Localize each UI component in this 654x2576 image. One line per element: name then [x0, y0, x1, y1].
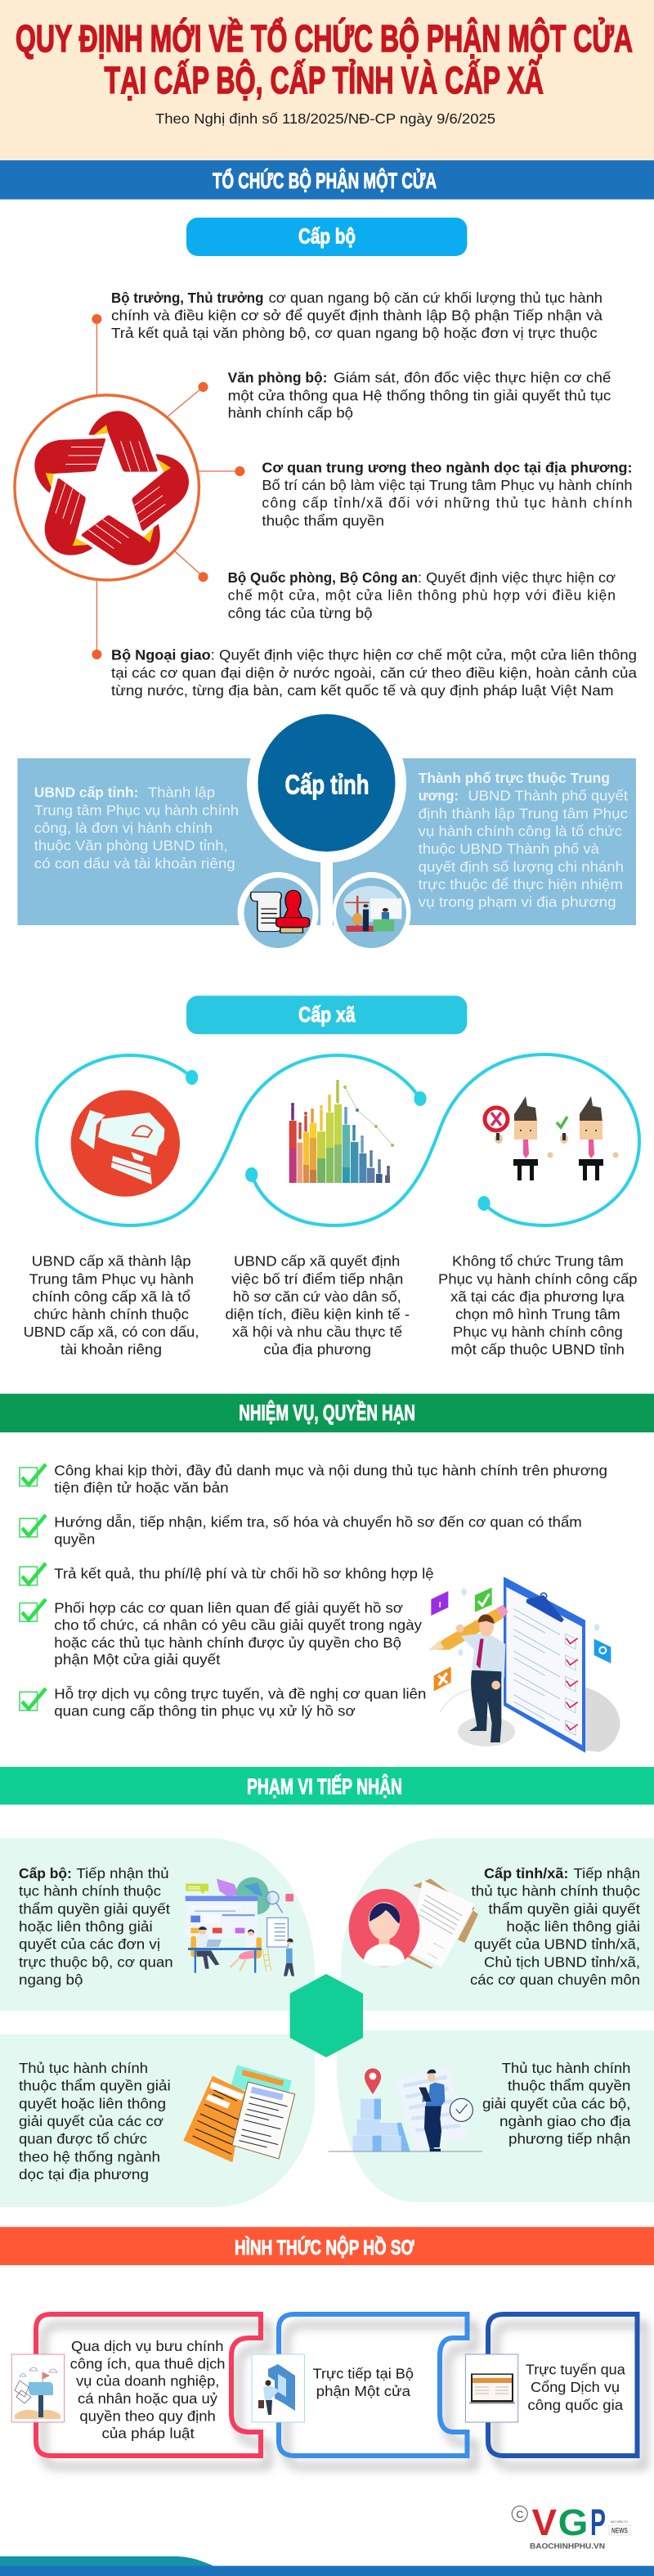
text: UBND cấp tỉnh: Trung tâm Phục vụ hành chính: [34, 802, 239, 819]
text: online: công quốc gia: [527, 2397, 623, 2413]
badge: Cấp tỉnh: Cấp tỉnh: [284, 770, 370, 800]
text: direct: Trực tiếp tại Bộ: [313, 2366, 414, 2382]
text: UBND cấp tỉnh: UBND cấp tỉnh:: [34, 784, 138, 801]
text block: Cơ quan trung ương theo ngành dọc: [262, 459, 633, 528]
text: postal: Qua dịch vụ bưu chính: [71, 2338, 224, 2354]
text: Cấp bộ: [19, 1865, 173, 1988]
pill: Cấp bộ: Cấp bộ: [298, 224, 356, 249]
text: vertical agencies: giải quyết của các cơ: [19, 2113, 164, 2129]
item 2: quyền: [54, 1531, 95, 1547]
text: vertical agencies: Thủ tục hành chính: [19, 2060, 148, 2076]
text: online: Cổng Dịch vụ: [531, 2379, 620, 2395]
pill: Cấp bộ: [186, 218, 467, 256]
text: Cấp xã column 2: diện tích, điều kiện kinh tế -: [226, 1306, 410, 1322]
text: Thành phố trực thuộc Trung ương: vụ trong phạm vi địa phương: [419, 894, 616, 910]
item 2: Hướng dẫn, tiếp nhận, kiểm tra, số hóa và chuyển hồ sơ đến cơ quan có thẩm: [54, 1513, 582, 1530]
card: postal submission: [11, 2314, 261, 2456]
text: UBND cấp tỉnh: có con dấu và tài khoản riêng: [34, 855, 235, 871]
text: Cấp xã column 3: chọn mô hình Trung tâm: [455, 1306, 620, 1322]
item 5: Hỗ trợ dịch vụ công trực tuyến, và đề nghị cơ quan liên: [54, 1685, 426, 1702]
text: Cấp xã column 1: chức hành chính thuộc: [34, 1306, 189, 1322]
icon: legal counter scene: [336, 878, 406, 948]
text block: Bộ trưởng, Thủ trưởng: cơ quan ngang bộ căn cứ khối lượng thủ tục hành: [269, 290, 602, 306]
text: UBND cấp tỉnh: thuộc Văn phòng UBND tỉnh,: [34, 838, 228, 854]
item 3: [20, 1563, 434, 1585]
subtitle: Theo Nghị định số 118/2025/NĐ-CP ngày 9/6/2025: [155, 110, 495, 127]
text: UBND cấp tỉnh: Thành lập: [148, 784, 215, 801]
text block: Bộ Ngoại giao: : Quyết định việc thực hiện cơ chế một cửa, một cửa liên thông: [211, 646, 637, 663]
text: Cấp xã column 2: của địa phương: [263, 1342, 371, 1358]
section heading: Hình thức nộp hồ sơ: HÌNH THỨC NỘP HỒ SƠ: [235, 2235, 414, 2259]
illustration: person with parcels and location pin: [329, 2066, 482, 2151]
text: Cấp xã column 3: xã tại các địa phương lựa: [450, 1288, 625, 1305]
logo: VGP News: [512, 2502, 630, 2551]
text: Cấp bộ: quyết của các đơn vị: [19, 1936, 160, 1953]
text: direct: phận Một cửa: [316, 2383, 410, 2399]
text: Thành phố trực thuộc Trung ương: thuộc UBND Thành phố và: [419, 841, 599, 857]
text block: Văn phòng bộ: Văn phòng bộ:: [228, 370, 327, 386]
text: Thành phố trực thuộc Trung ương: Thành phố trực thuộc Trung: [419, 770, 610, 786]
text: Cấp xã column 2: UBND cấp xã quyết định: [234, 1253, 400, 1270]
text: Cấp xã column 1: UBND cấp xã, có con dấu,: [24, 1324, 199, 1340]
logo: VGP News: BÁO ĐIỆN TỬ: [611, 2520, 628, 2524]
text: Cấp xã column 1: tài khoản riêng: [60, 1342, 162, 1358]
text block: Cơ quan trung ương theo ngành dọc: Bố trí cán bộ làm việc tại Trung tâm Phục vụ hành chính: [262, 477, 633, 493]
text: Cấp xã column 1: [24, 1253, 199, 1358]
text: Cấp bộ: ngang bộ: [19, 1971, 83, 1988]
text: Cấp xã column 3: Phục vụ hành chính công cấp: [438, 1270, 638, 1287]
text: postal: công ích, qua thuê dịch: [70, 2355, 226, 2371]
text block: Bộ Quốc phòng, Bộ Công an: Bộ Quốc phòng, Bộ Công an: [228, 569, 418, 586]
text: Cấp tỉnh/xã: thủ tục hành chính thuộc: [471, 1883, 640, 1899]
text: Cấp bộ: Tiếp nhận thủ: [76, 1865, 169, 1881]
item 4: [20, 1599, 422, 1668]
text: Cấp xã column 1: Trung tâm Phục vụ hành: [29, 1270, 194, 1287]
logo: VGP News: C: [517, 2509, 523, 2520]
logo: VGP News: P: [590, 2502, 606, 2543]
text: Cấp tỉnh/xã: [470, 1865, 640, 1988]
text: Cấp tỉnh/xã: các cơ quan chuyên môn: [470, 1971, 640, 1988]
decorative S-curve loops: [37, 1054, 639, 1225]
section heading: Nhiệm vụ, quyền hạn: NHIỆM VỤ, QUYỀN HẠN: [239, 1400, 415, 1425]
text block: Bộ Ngoại giao: Bộ Ngoại giao: [111, 646, 211, 663]
icon: star of five hands emblem: [15, 395, 200, 584]
chart: population bars: [289, 1080, 394, 1183]
text block: Bộ Quốc phòng, Bộ Công an: công tác của từng bộ: [228, 605, 373, 621]
panel: Cấp tỉnh/xã scope: [341, 1838, 654, 2011]
panel: Cấp tỉnh: [17, 704, 636, 954]
text: provincial reception: ngành giao cho địa: [499, 2113, 631, 2129]
text: Thành phố trực thuộc Trung ương: quyết định số lượng chi nhánh: [419, 858, 624, 874]
text: online: Trực tuyến qua: [526, 2362, 625, 2378]
text block: Bộ Quốc phòng, Bộ Công an: : Quyết định việc thực hiện cơ: [418, 569, 616, 586]
text: Cấp xã column 2: hồ sơ căn cứ vào dân số,: [233, 1288, 401, 1305]
text: Cấp tỉnh/xã: quyết của UBND tỉnh/xã,: [474, 1936, 640, 1953]
text: vertical agencies: quyết hoặc liên thông: [19, 2095, 166, 2111]
item 1: Công khai kịp thời, đầy đủ danh mục và nội dung thủ tục hành chính trên phương: [54, 1462, 607, 1478]
text: provincial reception: giải quyết của các bộ,: [482, 2095, 630, 2111]
panel: ministry-vertical agencies scope: [0, 2034, 315, 2207]
text: postal: [70, 2338, 226, 2441]
text: vertical agencies: dọc tại địa phương: [19, 2166, 149, 2183]
item 1: [20, 1462, 607, 1495]
item 5: [20, 1685, 426, 1720]
section heading: Phạm vi tiếp nhận: [0, 1767, 654, 1805]
text: Cấp tỉnh/xã: Chủ tịch UBND tỉnh/xã,: [484, 1953, 640, 1970]
text: online: [526, 2362, 625, 2413]
logo: VGP News: G: [558, 2502, 588, 2543]
text: Thành phố trực thuộc Trung ương: ương:: [419, 788, 459, 804]
text block: Bộ Ngoại giao: từng nước, từng địa bàn, cam kết quốc tế và quy định pháp luật Việt Nam: [111, 682, 613, 699]
text block: Bộ trưởng, Thủ trưởng: Trả kết quả tại văn phòng bộ, cơ quan ngang bộ hoặc đơn vị trực thuộc: [111, 325, 598, 341]
pill: Cấp xã: [186, 996, 467, 1034]
text: vertical agencies: [19, 2060, 171, 2183]
text: Thành phố trực thuộc Trung ương: vụ hành chính công là tổ chức: [419, 823, 622, 839]
text: postal: của pháp luật: [101, 2425, 195, 2441]
panel: Cấp bộ scope: [0, 1838, 315, 2011]
item 1: tiện điện tử hoặc văn bản: [54, 1479, 229, 1495]
text: Cấp xã column 3: Không tổ chức Trung tâm: [452, 1253, 624, 1270]
text: vertical agencies: quan được tổ chức: [19, 2130, 147, 2147]
text: Cấp xã column 2: xã hội và nhu cầu thực tế: [232, 1324, 402, 1340]
text block: Bộ Ngoại giao: [111, 646, 637, 699]
text: Cấp bộ: thẩm quyền giải quyết: [19, 1900, 170, 1917]
text: Cấp xã column 2: việc bố trí điểm tiếp nhận: [231, 1270, 403, 1287]
text block: Bộ Ngoại giao: tại các cơ quan đại diện ở nước ngoài, căn cứ theo điều kiện, hoàn cảnh của: [111, 664, 637, 681]
pill: Cấp xã: Cấp xã: [298, 1002, 356, 1027]
text block: Bộ Quốc phòng, Bộ Công an: chế một cửa, một cửa liên thông phù hợp với điều kiện: [228, 587, 616, 604]
text: Thành phố trực thuộc Trung ương: định thành lập Trung tâm Phục: [419, 805, 628, 821]
text: Cấp xã column 1: chính công cấp xã là tổ: [32, 1288, 190, 1305]
text: Cấp tỉnh/xã: thẩm quyền giải quyết: [488, 1900, 640, 1917]
text block: Văn phòng bộ: [228, 370, 611, 421]
text: direct: [313, 2366, 414, 2399]
text: Thành phố trực thuộc Trung ương: UBND Thành phố quyết: [468, 788, 628, 804]
illustration: team meeting with browser window: [186, 1877, 294, 1976]
item 4: Phối hợp các cơ quan liên quan để giải quyết hồ sơ: [54, 1600, 403, 1616]
text: UBND cấp tỉnh: [34, 784, 239, 871]
icon: two officials, rejected and approved: [485, 1096, 618, 1180]
text block: Bộ trưởng, Thủ trưởng: chính và điều kiện cơ sở để quyết định thành lập Bộ phận Tiếp nhận và: [111, 308, 602, 324]
section heading: Nhiệm vụ, quyền hạn: [0, 1394, 654, 1432]
text block: Văn phòng bộ: hành chính cấp bộ: [228, 405, 353, 421]
text: Cấp bộ: tục hành chính thuộc: [19, 1883, 161, 1899]
text: provincial reception: [482, 2060, 631, 2147]
logo: VGP News: NEWS: [611, 2526, 628, 2534]
hexagon emblem: [290, 1965, 363, 2057]
text: Cấp bộ: trực thuộc bộ, cơ quan: [19, 1953, 173, 1970]
text: Cấp xã column 1: UBND cấp xã thành lập: [32, 1253, 191, 1270]
text block: Cơ quan trung ương theo ngành dọc: công cấp tỉnh/xã đối với những thủ tục hành chính: [262, 495, 633, 511]
illustration: overlapping papers: [183, 2065, 295, 2162]
text: Thành phố trực thuộc Trung ương: trực thuộc để thực hiện nhiệm: [419, 876, 623, 892]
logo: VGP News: V: [531, 2502, 557, 2543]
text: Cấp bộ: hoặc liên thông giải: [19, 1918, 153, 1935]
title: [16, 17, 633, 101]
section heading: Phạm vi tiếp nhận: PHẠM VI TIẾP NHẬN: [247, 1774, 402, 1799]
text: Cấp tỉnh/xã: Cấp tỉnh/xã:: [484, 1865, 568, 1881]
text: Cấp bộ: Cấp bộ:: [19, 1865, 72, 1881]
item 4: cho tổ chức, cá nhân có yêu cầu giải quyết trong ngày: [54, 1617, 422, 1634]
section heading: Tổ chức Bộ phận Một cửa: [0, 160, 654, 200]
panel: provincial reception scope: [329, 2030, 654, 2202]
text: Thành phố trực thuộc Trung ương: [419, 770, 628, 910]
item 5: quan cung cấp thông tin phục vụ xử lý hồ sơ: [54, 1703, 356, 1720]
text: Cấp tỉnh/xã: hoặc liên thông giải: [506, 1918, 640, 1935]
logo: VGP News: BAOCHINHPHU.VN: [530, 2542, 605, 2551]
text block: Văn phòng bộ: một cửa thông qua Hệ thống thông tin giải quyết thủ tục: [228, 387, 611, 403]
item 4: hoặc các thủ tục hành chính được ủy quyền cho Bộ: [54, 1634, 401, 1651]
card: direct submission: [252, 2314, 468, 2456]
diagram connectors: [92, 314, 244, 659]
text: provincial reception: Thủ tục hành chính: [502, 2060, 630, 2076]
text block: Cơ quan trung ương theo ngành dọc: Cơ quan trung ương theo ngành dọc tại địa phương:: [262, 459, 633, 475]
text: provincial reception: thuộc thẩm quyền: [508, 2078, 630, 2094]
section heading: Tổ chức Bộ phận Một cửa: TỔ CHỨC BỘ PHẬN MỘT CỬA: [213, 167, 437, 193]
text: Cấp xã column 3: [438, 1253, 638, 1358]
text: Cấp tỉnh/xã: Tiếp nhận: [574, 1865, 640, 1881]
item 3: Trả kết quả, thu phí/lệ phí và từ chối hồ sơ không hợp lệ: [54, 1566, 434, 1582]
text: Cấp xã column 3: một cấp thuộc UBND tỉnh: [451, 1342, 625, 1358]
icon: hand stamping: [71, 1090, 180, 1197]
icon: mailbox: [11, 2354, 65, 2422]
illustration: man with pencil and clipboard: [428, 1576, 620, 1753]
text: postal: vụ của doanh nghiệp,: [76, 2372, 219, 2389]
section heading: Hình thức nộp hồ sơ: [0, 2227, 654, 2265]
text: Cấp xã column 3: Phục vụ hành chính công: [453, 1324, 623, 1340]
text block: Văn phòng bộ: Giám sát, đôn đốc việc thực hiện cơ chế: [334, 370, 611, 386]
header background: [0, 0, 654, 160]
icon: kiosk and visitor: [252, 2354, 304, 2422]
icon: laptop with national portal: [465, 2354, 518, 2422]
text: postal: quyền theo quy định: [79, 2407, 216, 2424]
text block: Bộ trưởng, Thủ trưởng: Bộ trưởng, Thủ trưởng: [111, 290, 263, 306]
text block: Cơ quan trung ương theo ngành dọc: thuộc thẩm quyền: [262, 512, 384, 528]
icon: scroll and stamp: [244, 878, 312, 948]
footer band: [0, 2556, 654, 2576]
text: provincial reception: phương tiếp nhận: [508, 2130, 630, 2147]
text: postal: cá nhân hoặc qua uỷ: [78, 2390, 217, 2407]
card: online submission: [465, 2314, 638, 2456]
badge: Cấp tỉnh: [258, 714, 396, 852]
text: vertical agencies: theo hệ thống ngành: [19, 2148, 160, 2165]
text: UBND cấp tỉnh: công, là đơn vị hành chính: [34, 820, 213, 836]
illustration: avatar with documents: [349, 1879, 478, 1969]
item 2: [20, 1513, 582, 1547]
text block: Bộ trưởng, Thủ trưởng: [111, 290, 602, 341]
text block: Bộ Quốc phòng, Bộ Công an: [228, 569, 616, 621]
checklist: duties: [20, 1462, 607, 1720]
item 4: phận Một cửa giải quyết: [54, 1652, 221, 1668]
text: vertical agencies: thuộc thẩm quyền giải: [19, 2078, 171, 2094]
text: Cấp xã column 2: [226, 1253, 410, 1358]
